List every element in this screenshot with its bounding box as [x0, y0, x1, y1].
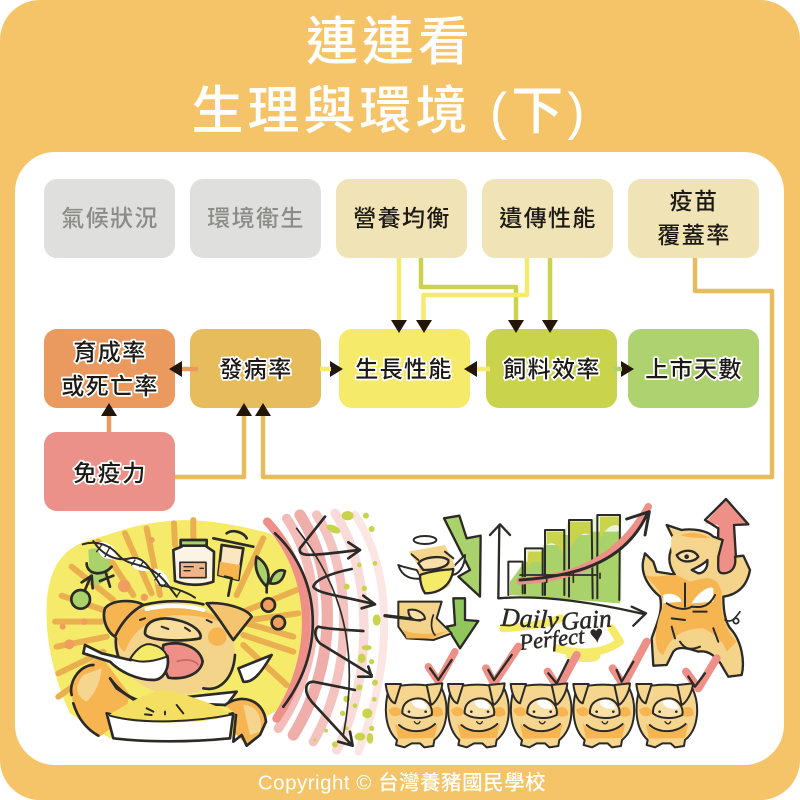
illustration: low mortality pigs and growth chart [385, 499, 750, 747]
illustration: pig eating with nutrition icons [47, 520, 310, 746]
box: 遺傳性能 [482, 179, 613, 258]
box: 免疫力 [44, 432, 175, 511]
box: 飼料效率 [486, 329, 617, 408]
box: 氣候狀況: 氣候狀況 [61, 205, 159, 231]
axes [490, 524, 646, 626]
box: 疫苗覆蓋率 [628, 179, 759, 258]
handwritten label: daily gain perfect: Perfect ♥ [517, 621, 605, 655]
bar chart: daily gain [490, 507, 649, 626]
box: 疫苗覆蓋率: 疫苗 [670, 188, 718, 214]
pig snout [145, 619, 201, 640]
checkmarks [428, 642, 717, 688]
radial rays [55, 520, 298, 697]
box: 生長性能: 生長性能 [355, 356, 453, 382]
box: 環境衛生 [190, 179, 321, 258]
box: 遺傳性能: 遺傳性能 [499, 205, 597, 231]
connector lines [109, 258, 772, 477]
box: 育成率或死亡率: 或死亡率 [61, 373, 159, 399]
trend arrows [520, 507, 648, 581]
icon: leaves and seeds [256, 557, 285, 629]
box: 飼料效率: 飼料效率 [503, 356, 601, 382]
box: 環境衛生: 環境衛生 [207, 205, 305, 231]
barrier bands [267, 513, 384, 752]
feed tray [107, 713, 233, 741]
white content panel [15, 152, 784, 765]
handwritten label: daily gain perfect: Daily [499, 603, 560, 635]
arrow: big green down arrow [444, 516, 481, 597]
title: 生理與環境 (下) [191, 83, 589, 141]
spoon with feed [83, 645, 168, 680]
box: 免疫力: 免疫力 [73, 460, 147, 486]
green particles [313, 511, 381, 747]
box: 疫苗覆蓋率: 覆蓋率 [657, 222, 731, 248]
deceased pig [385, 602, 452, 640]
bib [238, 655, 272, 682]
right arm [225, 700, 265, 745]
title: 連連看 [306, 14, 474, 72]
pig ears [104, 601, 143, 637]
box: 生長性能 [339, 329, 470, 408]
box: 發病率: 發病率 [219, 356, 293, 382]
box: 營養均衡 [336, 179, 467, 258]
row of five pigs [386, 683, 697, 747]
icon: supplement jar [173, 540, 214, 585]
icon: dna helix [83, 541, 195, 598]
angel pig [398, 536, 465, 593]
handwritten label: daily gain perfect: Gain [560, 605, 613, 636]
handwritten label: daily gain perfect [499, 603, 620, 658]
arrowheads [101, 320, 634, 416]
icon: male and female symbols [71, 548, 113, 609]
box: 育成率或死亡率: 育成率 [73, 339, 147, 365]
copyright footer: Copyright © 台灣養豬國民學校 [258, 772, 546, 794]
box: 上市天數 [628, 329, 759, 408]
icon: syringe [213, 531, 253, 596]
box: 發病率 [190, 329, 321, 408]
box: 育成率或死亡率 [44, 329, 175, 408]
red up arrow [705, 499, 748, 575]
pig mouth and tongue [163, 643, 203, 678]
box: 氣候狀況 [44, 179, 175, 258]
pig body [71, 601, 272, 746]
illustration: immune barrier arc with arrows and dots [267, 511, 384, 752]
box: 上市天數: 上市天數 [645, 356, 743, 382]
title [191, 14, 589, 141]
arrow: small green down arrow [447, 598, 478, 648]
yellow burst background [47, 520, 310, 738]
dark arc and arrows [275, 517, 375, 746]
muscular pig [643, 525, 750, 677]
box: 營養均衡: 營養均衡 [353, 205, 451, 231]
